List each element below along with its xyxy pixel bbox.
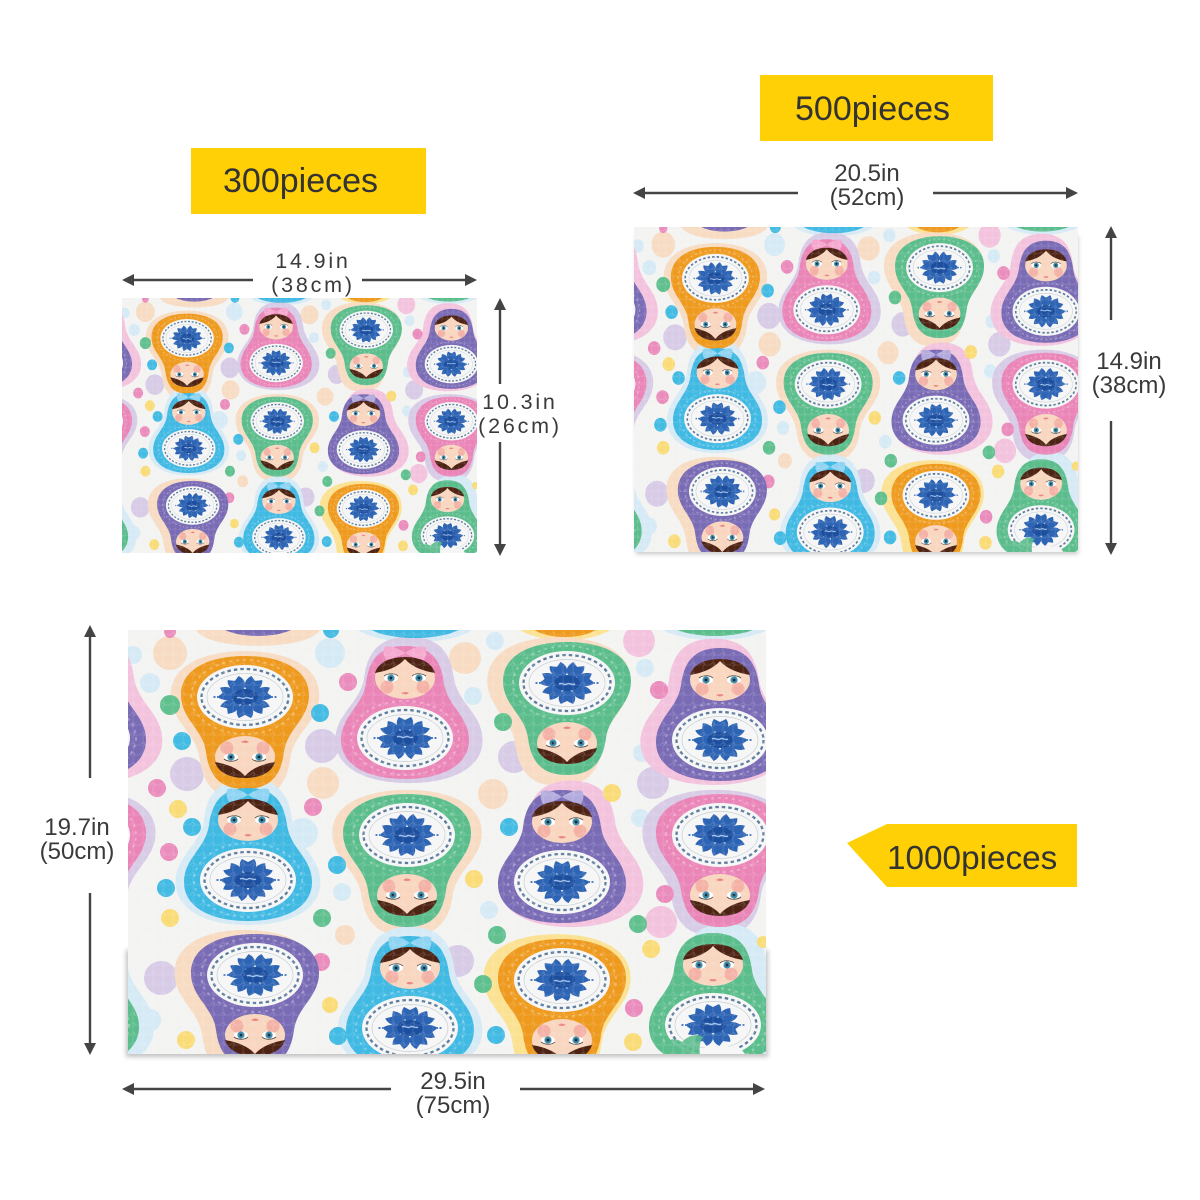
500 pieces height dimension: 14.9in bbox=[1096, 348, 1162, 375]
label: 500 pieces: 500pieces bbox=[795, 90, 950, 128]
1000 pieces puzzle image bbox=[8, 600, 794, 1083]
300 pieces width dimension: (38cm) bbox=[271, 273, 355, 297]
label: 300 pieces: 300pieces bbox=[223, 162, 378, 200]
500 pieces puzzle shadow bbox=[636, 236, 1078, 554]
300 pieces width dimension bbox=[122, 249, 477, 297]
500 pieces height dimension bbox=[1092, 226, 1166, 555]
1000 pieces height dimension bbox=[40, 625, 114, 1055]
300 pieces height dimension: 10.3in bbox=[482, 390, 558, 414]
1000 pieces puzzle shadow bbox=[126, 950, 768, 1057]
500 pieces puzzle image bbox=[551, 204, 1098, 574]
1000 pieces width dimension: 29.5in bbox=[420, 1068, 486, 1095]
label: 500 pieces bbox=[760, 75, 993, 141]
300 pieces puzzle image bbox=[55, 280, 493, 570]
500 pieces width dimension: 20.5in bbox=[834, 160, 900, 187]
300 pieces height dimension: (26cm) bbox=[478, 414, 562, 438]
1000 pieces width dimension: (75cm) bbox=[416, 1092, 490, 1119]
500 pieces width dimension: (52cm) bbox=[830, 184, 904, 211]
500 pieces width dimension bbox=[633, 160, 1078, 211]
label: 300 pieces bbox=[191, 148, 426, 214]
1000 pieces width dimension bbox=[122, 1068, 765, 1119]
1000 pieces height dimension: (50cm) bbox=[40, 838, 114, 865]
300 pieces height dimension bbox=[478, 298, 562, 556]
300 pieces width dimension: 14.9in bbox=[275, 249, 351, 273]
label: 1000 pieces: 1000pieces bbox=[887, 840, 1057, 877]
1000 pieces height dimension: 19.7in bbox=[44, 814, 110, 841]
label: 1000 pieces bbox=[847, 824, 1077, 887]
500 pieces height dimension: (38cm) bbox=[1092, 372, 1166, 399]
